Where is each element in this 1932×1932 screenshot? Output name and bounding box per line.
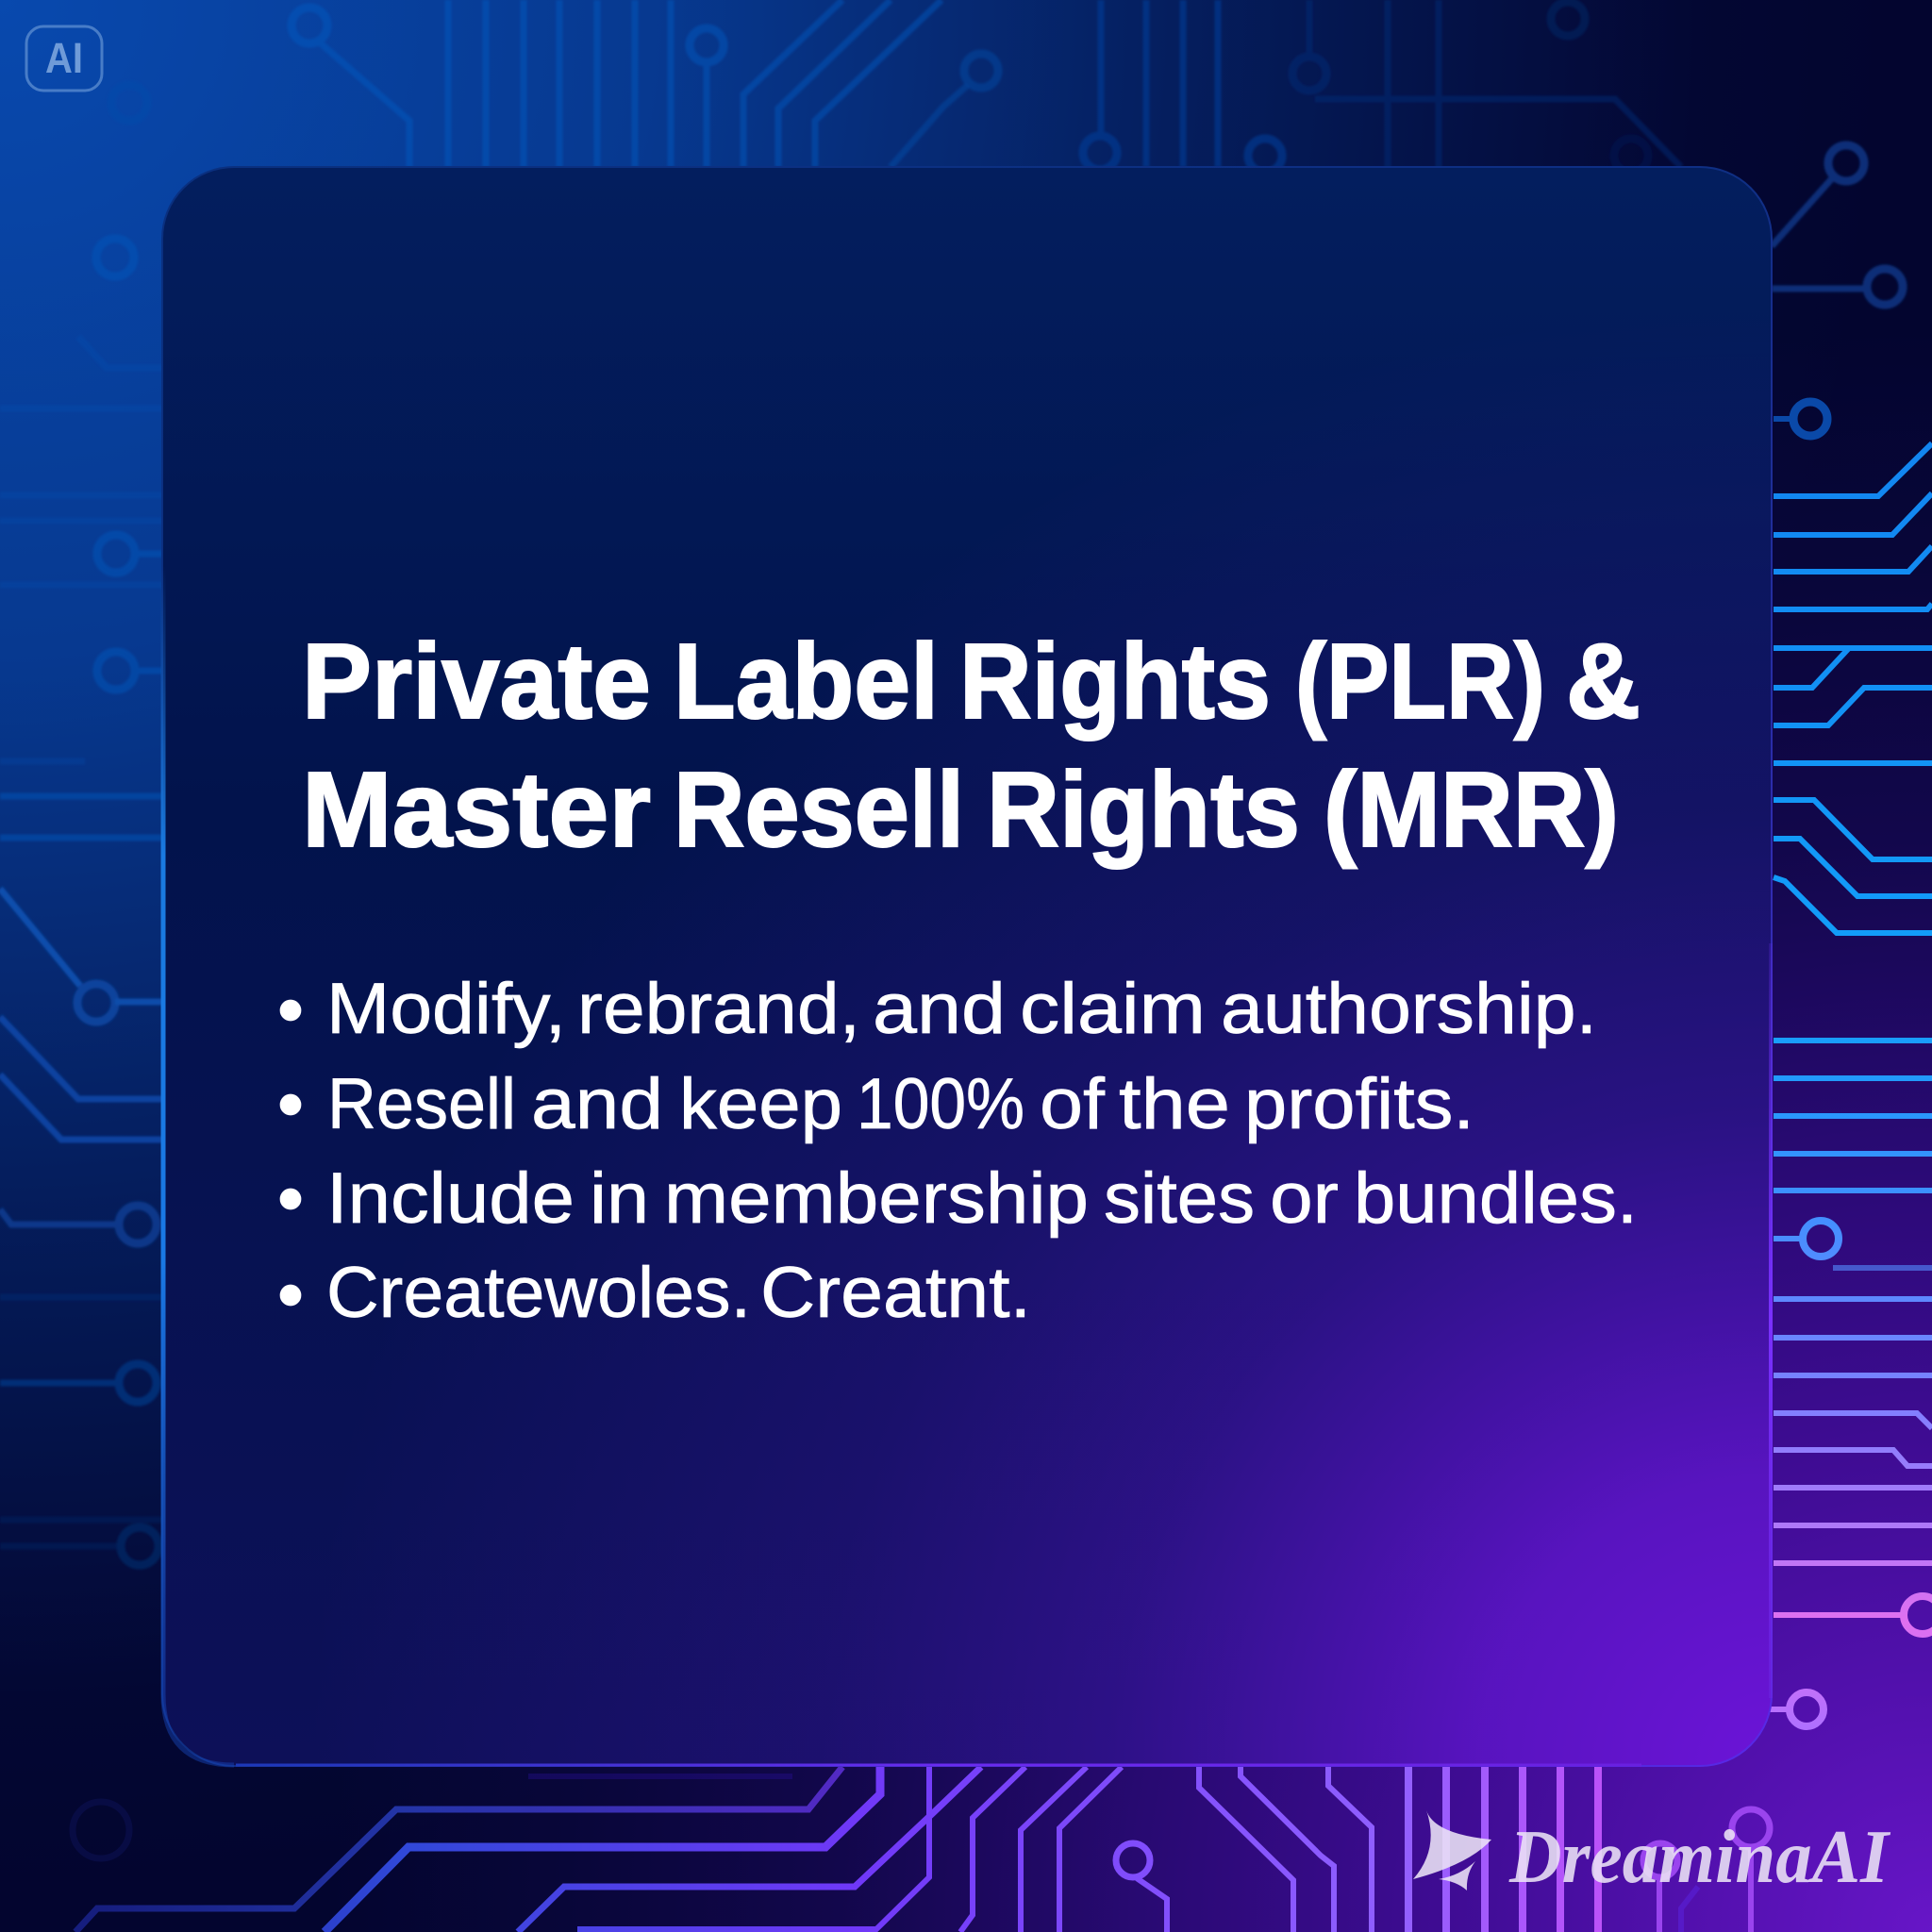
heading line 2: Resell [674,750,964,869]
heading line 1: & [1566,622,1641,741]
badge: AI: AI [45,34,83,82]
bullet 1: authorship. [1221,969,1597,1049]
bullet 2: profits. [1244,1064,1474,1144]
bullet 3: Include [326,1158,575,1239]
bullet 2: Resell [327,1064,516,1144]
bullet 2: the [1119,1064,1230,1144]
bullet 1: rebrand, [577,969,860,1049]
bullet 1: and [873,969,1006,1049]
bullet 4 [280,1253,1031,1333]
bullet 2: keep [679,1064,842,1144]
heading line 1: (PLR) [1295,622,1545,741]
heading line 2: (MRR) [1324,750,1619,869]
bullet list [280,969,1638,1333]
heading line 2: Master [302,750,651,869]
card border [162,167,1772,1766]
bullet 3 [280,1158,1638,1239]
icon: logo wing [1413,1810,1491,1890]
bullet 1 [280,969,1597,1049]
bullet 1: claim [1020,969,1206,1049]
logo: DreaminaAI [1413,1810,1891,1899]
panel: main card [162,167,1772,1766]
heading [302,622,1641,869]
card purple glow [162,167,1772,1766]
bullet 2: and [531,1064,663,1144]
circuit traces: left [0,239,162,1565]
heading line 1: Rights [959,622,1271,741]
logo wordmark: DreaminaAI [1508,1816,1891,1899]
heading line 1 [302,622,1641,741]
bullet 2: of [1040,1064,1106,1144]
heading line 2 [302,750,1619,869]
heading line 2: Rights [987,750,1300,869]
bullet 4: Createwoles. [326,1253,751,1333]
circuit traces: bottom [73,1766,1770,1932]
card background [162,167,1772,1766]
bullet 3: in [590,1158,649,1239]
bullet 1: Modify, [326,969,566,1049]
bullet 3: or [1270,1158,1339,1239]
bullet 2 [280,1064,1474,1144]
heading line 1: Private [302,622,651,741]
bullet 3: bundles. [1354,1158,1638,1239]
bullet 2: 100% [857,1064,1024,1144]
bullet 3: membership [664,1158,1089,1239]
heading line 1: Label [674,622,939,741]
bullet 3: sites [1104,1158,1255,1239]
circuit traces: top [111,0,1681,173]
bullet 4: Creatnt. [760,1253,1031,1333]
circuit traces: right [1764,145,1932,1726]
badge: AI [26,26,102,91]
